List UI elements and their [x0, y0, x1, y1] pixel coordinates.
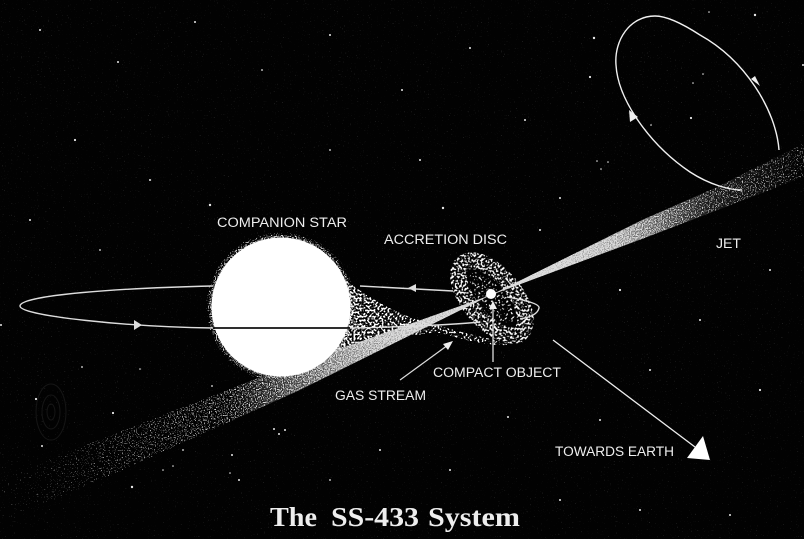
title [270, 502, 521, 532]
accretion disc [446, 249, 538, 347]
label: gas stream: GAS STREAM [335, 388, 426, 403]
arrow: towards earth [553, 340, 710, 460]
title: System [428, 502, 521, 532]
title: The [270, 502, 317, 532]
label: accretion disc: ACCRETION DISC [384, 232, 507, 247]
binary orbit [20, 284, 539, 330]
gas stream [335, 280, 510, 352]
jet upper-right beam [491, 143, 804, 295]
jet precession orbit [616, 16, 779, 190]
label: compact object: COMPACT OBJECT [433, 365, 561, 380]
label: companion star: COMPANION STAR [217, 215, 347, 230]
faint lens rings [36, 384, 66, 440]
companion star [206, 232, 356, 382]
arrow: compact object pointer [489, 301, 497, 362]
label: towards earth: TOWARDS EARTH [555, 444, 674, 459]
title: SS-433 [331, 502, 419, 532]
arrow: gas stream pointer [400, 341, 453, 380]
compact object [486, 289, 496, 299]
jet lower-left beam [0, 295, 491, 520]
label: jet: JET [716, 236, 741, 251]
